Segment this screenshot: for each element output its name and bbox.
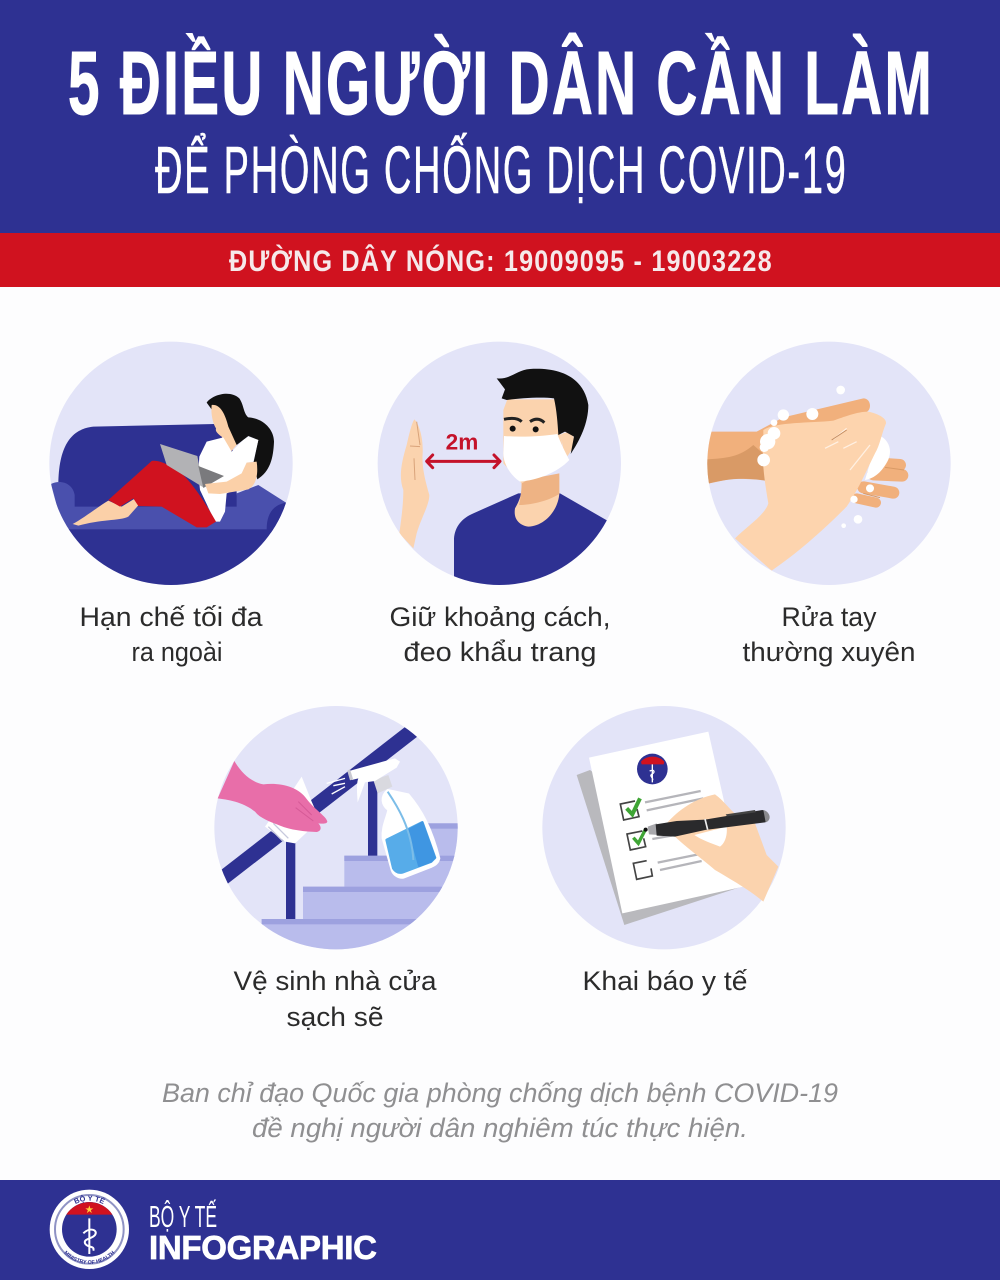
icon: cleaning stair rail with spray (214, 706, 458, 950)
arrow: two metres (427, 455, 500, 468)
label line 2: ra ngoài (132, 637, 222, 667)
note line 2: đề nghị người dân nghiêm túc thực hiện. (252, 1113, 748, 1143)
closing note (162, 1078, 838, 1143)
distance label: 2m (446, 429, 478, 454)
label: Hạn chế tối đa (80, 602, 264, 632)
panel: stay home (40, 342, 307, 667)
soap bubbles (757, 386, 874, 528)
mini logo (637, 754, 668, 784)
checklist (620, 791, 703, 879)
spray bottle (327, 758, 439, 878)
label line 2: sạch sẽ (286, 1002, 384, 1032)
label: Rửa tay (782, 602, 877, 632)
brand name large: INFOGRAPHIC (149, 1229, 377, 1266)
pen (644, 810, 770, 837)
hotline text: ĐƯỜNG DÂY NÓNG: 19009095 - 19003228 (229, 244, 772, 277)
form shadow sheet (577, 770, 742, 925)
hand (667, 794, 778, 902)
ministry logo: BỘ Y TẾ (74, 1194, 106, 1204)
label line 2: đeo khẩu trang (404, 637, 596, 667)
icon: hands with soap (707, 342, 951, 585)
label: Giữ khoảng cách, (390, 602, 610, 632)
ministry logo: MINISTRY OF HEALTH (64, 1250, 114, 1264)
header banner (0, 0, 1000, 234)
ministry logo (50, 1190, 129, 1269)
hotline bar (0, 233, 1000, 287)
gloved hand with cloth (218, 761, 327, 843)
icon: form with pen (542, 706, 786, 949)
label: Khai báo y tế (582, 966, 748, 996)
panel: clean the house (214, 706, 478, 1032)
brand name small: BỘ Y TẾ (149, 1199, 217, 1234)
panel: distance and mask (378, 342, 621, 667)
icon: woman on sofa with laptop (49, 342, 293, 585)
label: Vệ sinh nhà cửa (234, 966, 438, 996)
footer band (0, 1180, 1000, 1280)
woman (73, 394, 274, 527)
label line 2: thường xuyên (742, 637, 916, 667)
panel: health declaration (542, 706, 786, 996)
icon: man with mask 2m apart (378, 342, 621, 597)
note line 1: Ban chỉ đạo Quốc gia phòng chống dịch bệnh COVID-19 (162, 1078, 838, 1108)
title line 1: 5 ĐIỀU NGƯỜI DÂN CẦN LÀM (68, 31, 932, 133)
form sheet (589, 732, 743, 913)
title line 2: ĐỂ PHÒNG CHỐNG DỊCH COVID-19 (155, 133, 846, 208)
panel: wash hands (707, 342, 951, 667)
